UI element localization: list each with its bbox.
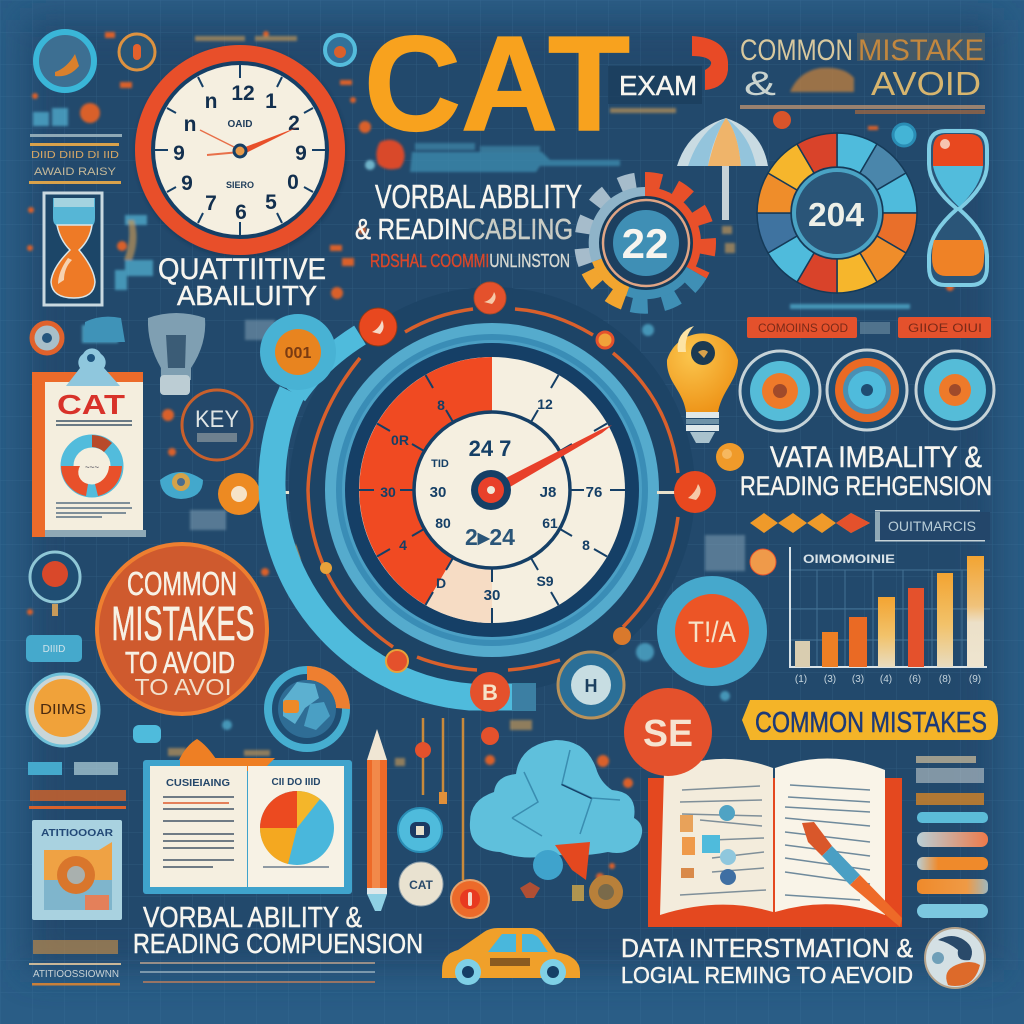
- dial face: 80: [435, 515, 451, 531]
- title: CAT: [364, 8, 630, 159]
- scattered smudges: [27, 31, 954, 881]
- heading: data ability right: [740, 441, 992, 501]
- heading: verbal ability top: [355, 178, 582, 271]
- outer swoosh ring: 001: [285, 345, 311, 362]
- heading: quantitative ability: ABAILUITY: [177, 280, 317, 311]
- coin badge: DIIMS: [40, 701, 86, 718]
- small orange ball near umbrella: [773, 111, 791, 129]
- heading: common mistakes top right: [740, 33, 985, 114]
- outer swoosh ring: [260, 282, 695, 718]
- icon: wall clock: 12: [231, 82, 255, 105]
- dial face: 12: [537, 396, 553, 412]
- bar chart: (3): [852, 674, 864, 685]
- icon: wall clock: n: [184, 113, 196, 136]
- heading: common mistakes top right: &: [744, 65, 776, 103]
- heading: verbal ability bottom: [133, 902, 423, 959]
- round badge red: [624, 688, 712, 776]
- dial face: 2▸24: [465, 524, 515, 550]
- open book with pen: [648, 758, 902, 927]
- banner texture strip: [365, 140, 620, 172]
- icon: wall clock: 5: [265, 191, 277, 214]
- bar chart: OIMOMOINIE: [803, 552, 895, 566]
- bar chart: (3): [824, 674, 836, 685]
- left label block: AWAID RAISY: [34, 166, 117, 178]
- badge: common mistakes to avoid: [97, 544, 267, 714]
- key badge: KEY: [195, 406, 239, 433]
- icon: globe: [925, 928, 985, 988]
- dial face: TID: [431, 458, 449, 470]
- icon: cloud: [470, 740, 642, 880]
- heading: common mistakes top right: AVOID: [871, 65, 981, 102]
- icon: wall clock: 6: [235, 201, 247, 224]
- bead divider: [750, 510, 990, 542]
- badge: common mistakes to avoid: TO AVOID: [125, 645, 235, 680]
- center column lines and icons: [398, 718, 499, 918]
- badge: common mistakes to avoid: MISTAKES: [112, 598, 254, 651]
- heading: common mistakes top right: MISTAKE: [858, 34, 984, 67]
- icon: wall clock: 1: [265, 90, 277, 113]
- icon: wall clock: 9: [181, 172, 193, 195]
- right strips: [916, 756, 988, 918]
- sticker strips left: [28, 762, 375, 986]
- badge: TIA: [657, 576, 767, 686]
- icon: umbrella: [677, 118, 768, 220]
- bar chart: (6): [909, 674, 921, 685]
- dial face: 0R: [391, 432, 409, 448]
- poster icon left: [32, 820, 122, 920]
- sticker strips left: ATITIOOSSIOWNN: [33, 969, 119, 980]
- clipboard CAT: [32, 348, 146, 537]
- open book with pie: CUSIEIAING: [166, 778, 230, 789]
- icon: wall clock: 9: [173, 142, 185, 165]
- dial face: D: [436, 575, 446, 591]
- label strip: [747, 317, 991, 338]
- badge: common mistakes to avoid: TO AVOI: [134, 674, 232, 700]
- dial face: 8: [582, 537, 590, 553]
- heading: verbal ability bottom: VORBAL ABILITY &: [143, 902, 362, 934]
- bar chart: (8): [939, 674, 951, 685]
- heading: verbal ability top: RDSHAL COOMMIUNLINSTON: [370, 251, 570, 271]
- open book with pie: CII DO IIID: [272, 777, 320, 788]
- icon: wall clock: 9: [295, 142, 307, 165]
- label strip: COMOIINS OOD: [758, 321, 848, 335]
- dial face: [359, 357, 716, 623]
- icon: gear 22: 22: [622, 220, 668, 267]
- heading: data ability right: VATA IMBALITY &: [770, 441, 982, 474]
- icon: wall clock: OAID: [228, 119, 252, 130]
- central dial: [260, 282, 716, 718]
- three target icons: [740, 350, 994, 431]
- clipboard CAT: CAT: [57, 389, 125, 420]
- left magnifier icons: [26, 552, 82, 662]
- dial face: 30: [430, 484, 446, 501]
- icon: gear 22: [583, 181, 707, 305]
- icon: pencil: [367, 729, 387, 911]
- dial face: 30: [380, 484, 396, 500]
- key badge: [182, 390, 252, 460]
- heading: data interpretation bottom: [621, 933, 913, 988]
- dial face: 24 7: [469, 436, 511, 461]
- round badge red: SE: [643, 713, 693, 755]
- coin badge: [27, 674, 161, 746]
- icon: hourglass left: [44, 193, 102, 305]
- small top left icons: [36, 32, 355, 90]
- left magnifier icons: DIIID: [43, 644, 65, 655]
- center column lines and icons: CAT: [409, 878, 434, 892]
- bar chart: (9): [969, 674, 981, 685]
- badge: common mistakes to avoid: COMMON: [127, 565, 237, 602]
- bead divider: OUITMARCIS: [888, 518, 976, 534]
- icon: wall clock: [135, 45, 345, 255]
- dial face: 61: [542, 515, 558, 531]
- dial face: 30: [484, 587, 500, 604]
- icon: wall clock: n: [205, 90, 217, 113]
- heading: quantitative ability: QUATTIITIVE: [158, 253, 326, 286]
- bar chart: (4): [880, 674, 892, 685]
- small coin icons: [160, 472, 338, 515]
- icon: hourglass right: [893, 124, 987, 285]
- icon: wall clock: 2: [288, 112, 300, 135]
- left label block: DIID DIID DI IID: [31, 150, 119, 161]
- heading: common mistakes top right: COMMON: [740, 34, 853, 67]
- icon: wall clock: 0: [287, 171, 299, 194]
- dial face: S9: [536, 573, 554, 589]
- icon: wall clock: 7: [205, 192, 217, 215]
- broken pie icon: [268, 666, 350, 748]
- left label block: [29, 134, 122, 184]
- heading: data interpretation bottom: DATA INTERSTMATION &: [621, 933, 913, 963]
- poster icon left: ATITIOOOAR: [41, 828, 114, 839]
- outer swoosh ring: H: [584, 676, 598, 696]
- heading: verbal ability top: VORBAL ABBLITY: [375, 178, 582, 215]
- heading: data interpretation bottom: LOGIAL REMING TO AEVOID: [621, 962, 913, 988]
- heading: quantitative ability: [158, 253, 326, 311]
- bar chart: (1): [795, 674, 807, 685]
- left mid icons: [32, 313, 205, 395]
- dial face: 8: [437, 397, 445, 413]
- bar chart: [750, 547, 990, 685]
- icon: light bulb: [667, 326, 744, 471]
- open book with pie: [143, 739, 352, 894]
- heading: verbal ability top: & READINCABLING: [355, 214, 573, 246]
- clipboard CAT: ~~~: [85, 463, 99, 472]
- dial face: J8: [540, 484, 556, 501]
- extra bubbles below cloud: [520, 875, 623, 909]
- outer swoosh ring: B: [482, 680, 498, 705]
- dial face: 4: [399, 537, 407, 553]
- chart: donut 2024: 204: [808, 196, 865, 233]
- dial face: 76: [586, 484, 602, 501]
- title: EXAM: [619, 70, 697, 101]
- icon: car: [442, 928, 580, 985]
- heading: verbal ability bottom: READING COMPUENSION: [133, 928, 423, 959]
- chart: donut 2024: [757, 133, 917, 293]
- label strip: GIIOE OIUI: [908, 321, 982, 335]
- icon: wall clock: SIERO: [226, 180, 254, 190]
- badge: TIA: T!/A: [688, 616, 736, 649]
